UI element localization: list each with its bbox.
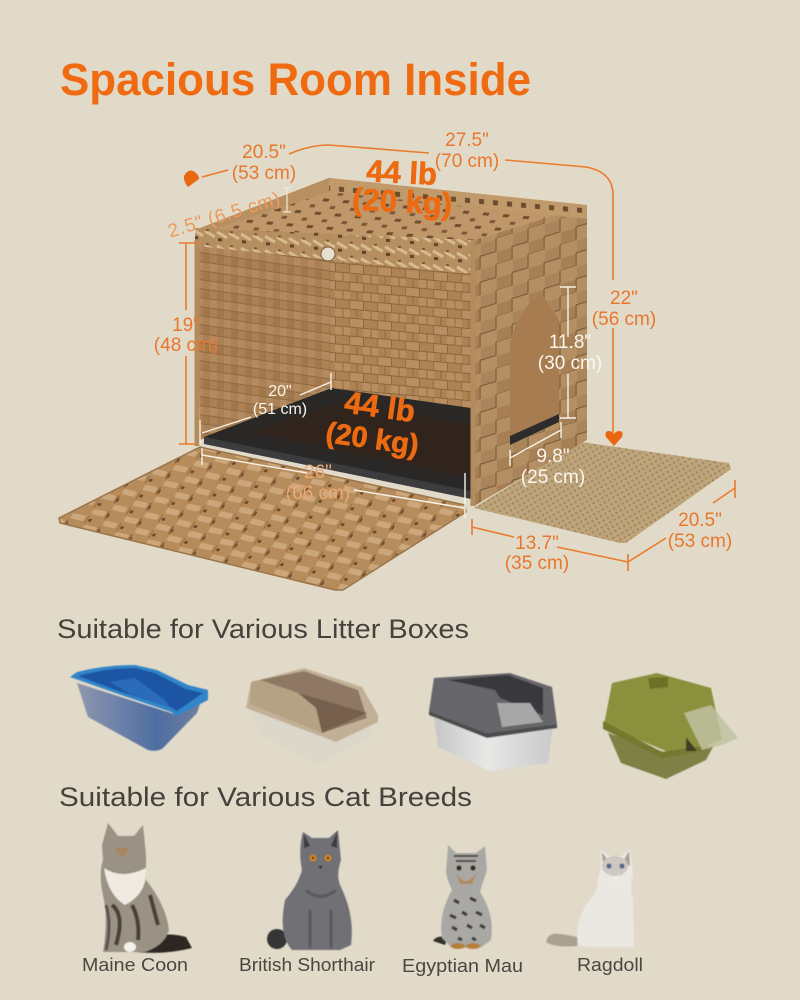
dimension: arch width 9.8 in: 9.8" xyxy=(536,446,570,467)
shelf back rim xyxy=(329,178,587,219)
dimension: mat length 20.5 in: 20.5" xyxy=(678,510,722,531)
arch opening xyxy=(510,293,559,445)
dimension: 44 lb floor load xyxy=(324,383,426,462)
dimension: top depth 20.5 in: (53 cm) xyxy=(232,163,296,184)
dimension: door width 26 in: (66 cm) xyxy=(286,483,350,504)
black litter tray xyxy=(204,388,471,499)
dimension: rim height 2.5 in: 2.5" (6.5 cm) xyxy=(166,188,283,242)
dimension: mat width 13.7 in xyxy=(472,519,628,574)
dimension: inner depth 20 in: (51 cm) xyxy=(253,401,307,418)
dimension: top depth 20.5 in: 20.5" xyxy=(242,142,286,163)
dimension: mat length 20.5 in: (53 cm) xyxy=(668,531,732,552)
dimension: inner height 19 in xyxy=(154,243,218,444)
dimension: 44 lb floor load: 44 lb xyxy=(342,385,417,429)
litter box: blue xyxy=(70,665,208,751)
dimension: width 27.5 in: (70 cm) xyxy=(435,151,499,172)
product: wicker litter box enclosure xyxy=(59,178,731,590)
litter box row xyxy=(70,665,738,779)
heading: litter boxes: Suitable for Various Litter Boxes xyxy=(57,614,469,644)
dimension: inner depth 20 in xyxy=(200,373,331,445)
dimension: 44 lb top load: 44 lb xyxy=(366,153,438,192)
front header band xyxy=(195,228,474,274)
dimension: height 22 in xyxy=(592,288,656,446)
caption: Ragdoll: Ragdoll xyxy=(577,955,643,975)
dimension: inner height 19 in: 19" xyxy=(172,315,200,336)
cat: Ragdoll xyxy=(546,849,634,947)
dimension: top depth 20.5 in xyxy=(184,142,429,187)
clear flap xyxy=(684,705,738,750)
cat: Egyptian Mau xyxy=(433,845,492,949)
dimension: arch height 11.8 in: (30 cm) xyxy=(538,353,602,374)
litter box: olive covered xyxy=(603,673,738,779)
cat: British Shorthair xyxy=(267,830,352,950)
dimension: mat width 13.7 in: 13.7" xyxy=(515,533,559,554)
left inner wall xyxy=(198,238,330,440)
dimension: height 22 in: (56 cm) xyxy=(592,309,656,330)
dimension: width 27.5 in: 27.5" xyxy=(445,130,489,151)
caption: Egyptian Mau: Egyptian Mau xyxy=(402,956,523,976)
caption: Maine Coon: Maine Coon xyxy=(82,955,188,975)
dimension: arch width 9.8 in xyxy=(510,422,585,488)
dimension: 44 lb top load: (20 kg) xyxy=(351,182,453,222)
heart marker xyxy=(605,431,623,446)
front posts xyxy=(197,240,473,506)
dimension: arch height 11.8 in xyxy=(538,287,602,418)
right side panel with arched door xyxy=(474,205,587,506)
dimension: 44 lb top load xyxy=(351,153,455,222)
top shelf xyxy=(195,178,587,240)
dimension: height 22 in: 22" xyxy=(610,288,638,309)
dimension: width 27.5 in xyxy=(435,130,613,280)
dimension: 44 lb floor load: (20 kg) xyxy=(324,417,421,462)
litter mat xyxy=(474,442,731,543)
dimension: mat width 13.7 in: (35 cm) xyxy=(505,553,569,574)
cat: Maine Coon xyxy=(101,823,192,953)
heart marker xyxy=(184,171,199,187)
hanging tag xyxy=(321,247,335,261)
cat row xyxy=(101,823,634,953)
open door panel xyxy=(59,447,466,590)
caption: British Shorthair: British Shorthair xyxy=(239,955,375,975)
dimension: inner height 19 in: (48 cm) xyxy=(154,335,218,356)
dimension: door width 26 in: 26" xyxy=(304,462,332,483)
dimension: mat length 20.5 in xyxy=(628,480,735,562)
back wall xyxy=(330,250,472,412)
dimension: inner depth 20 in: 20" xyxy=(268,383,292,400)
litter box: grey and steel xyxy=(429,673,557,771)
dimension: door width 26 in xyxy=(202,448,465,518)
title: Spacious Room Inside xyxy=(60,54,531,105)
litter box: beige and taupe xyxy=(246,668,378,765)
dimension: arch width 9.8 in: (25 cm) xyxy=(521,467,585,488)
heading: cat breeds: Suitable for Various Cat Breeds xyxy=(59,782,472,812)
shelf left rim xyxy=(195,178,329,232)
dimension: arch height 11.8 in: 11.8" xyxy=(549,332,591,353)
